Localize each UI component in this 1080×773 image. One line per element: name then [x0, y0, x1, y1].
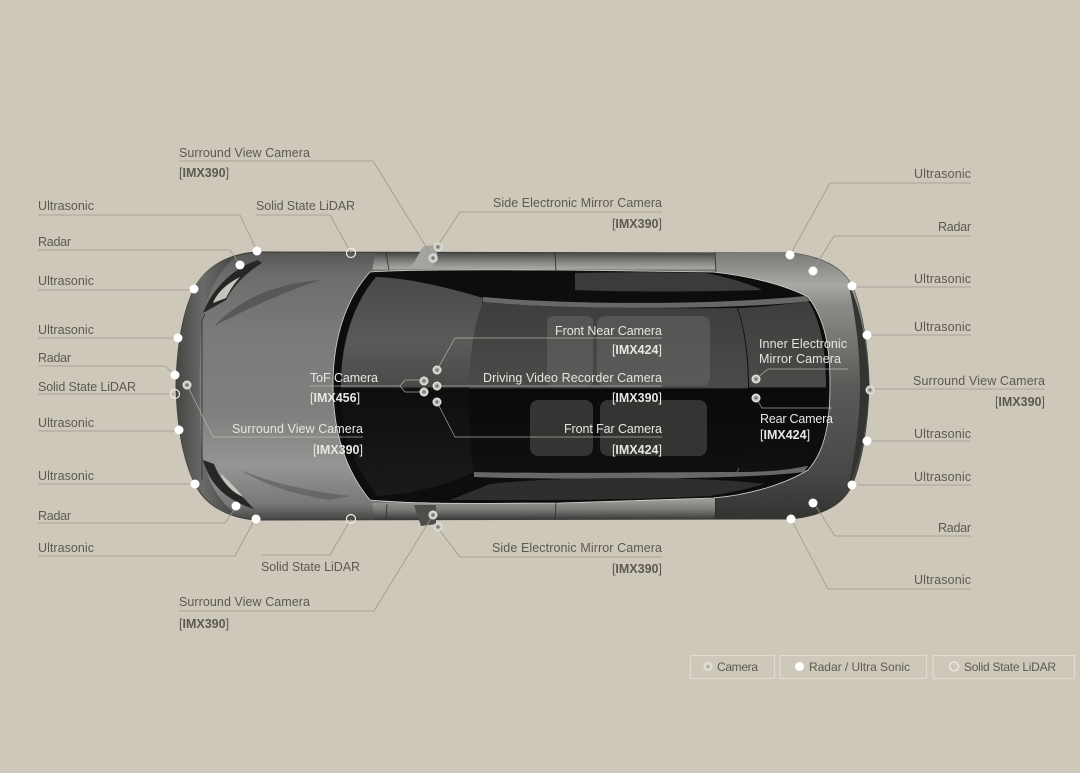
bottom mirror — [414, 505, 436, 526]
labels: interior cameras: Front Far Camera — [564, 422, 662, 436]
car top view — [176, 245, 869, 526]
panoramic roof — [469, 302, 748, 473]
labels: interior cameras: [IMX424] — [612, 443, 662, 457]
labels: right side: Ultrasonic — [914, 272, 971, 286]
legend — [690, 656, 1074, 678]
hood creases — [214, 280, 320, 326]
windshield — [341, 277, 483, 496]
bottom side window reflections — [450, 478, 765, 500]
labels: interior cameras: Driving Video Recorder Camera — [483, 371, 662, 385]
labels: right side: Ultrasonic — [914, 320, 971, 334]
labels: right side: Surround View Camera — [913, 374, 1045, 388]
labels: right side: [IMX390] — [995, 395, 1045, 409]
labels: left side: [IMX390] — [179, 166, 229, 180]
labels: left side: Solid State LiDAR — [261, 560, 360, 574]
legend: camera — [690, 656, 774, 678]
markers: solid state lidar — [170, 248, 356, 524]
rear rim — [848, 282, 869, 488]
labels: interior cameras: [IMX424] — [760, 428, 810, 442]
roof edge strips — [474, 296, 810, 479]
leader lines: exterior — [38, 161, 1045, 611]
legend: camera: Camera — [717, 660, 758, 674]
front seats — [547, 316, 710, 386]
labels: right side: Radar — [938, 220, 971, 234]
labels: interior cameras: [IMX390] — [612, 391, 662, 405]
labels: left side: Ultrasonic — [38, 323, 94, 337]
side windows and glass surround — [333, 270, 830, 503]
top mirror — [405, 245, 438, 268]
car body — [176, 252, 869, 520]
labels: left side: Ultrasonic — [38, 541, 94, 555]
labels: right side — [913, 167, 1045, 587]
labels: right side: Ultrasonic — [914, 427, 971, 441]
markers: radar and ultrasonic — [170, 246, 872, 524]
legend: radar and ultrasonic: Radar / Ultra Sonic — [809, 660, 910, 674]
legend: solid state lidar — [933, 656, 1074, 678]
labels: interior cameras: ToF Camera — [310, 371, 378, 385]
labels: left side: Surround View Camera — [179, 146, 310, 160]
top headlight — [203, 260, 262, 313]
labels: side mirror cameras — [492, 196, 662, 576]
labels: left side: Solid State LiDAR — [256, 199, 355, 213]
labels: left side: [IMX390] — [179, 617, 229, 631]
rear seats — [530, 400, 707, 456]
labels: right side: Radar — [938, 521, 971, 535]
top side window reflections — [575, 272, 762, 292]
labels: interior cameras — [232, 324, 847, 457]
rear deck — [715, 253, 869, 519]
labels: interior cameras: [IMX424] — [612, 343, 662, 357]
labels: left side: Ultrasonic — [38, 416, 94, 430]
labels: left side: Ultrasonic — [38, 469, 94, 483]
labels: left side: Ultrasonic — [38, 199, 94, 213]
labels: interior cameras: Rear Camera — [760, 412, 833, 426]
labels: left side: Surround View Camera — [179, 595, 310, 609]
labels: left side: Radar — [38, 351, 71, 365]
labels: side mirror cameras: Side Electronic Mirror Camera — [492, 541, 662, 555]
top sill — [372, 253, 715, 271]
bottom headlight — [203, 460, 254, 509]
labels: left side — [38, 146, 360, 631]
labels: right side: Ultrasonic — [914, 470, 971, 484]
labels: side mirror cameras: Side Electronic Mirror Camera — [493, 196, 662, 210]
bottom sill — [372, 499, 715, 519]
labels: left side: Ultrasonic — [38, 274, 94, 288]
labels: left side: Radar — [38, 235, 71, 249]
legend: solid state lidar: Solid State LiDAR — [964, 660, 1056, 674]
legend: radar and ultrasonic — [780, 656, 926, 678]
labels: right side: Ultrasonic — [914, 573, 971, 587]
trunk handle — [757, 496, 792, 513]
labels: side mirror cameras: [IMX390] — [612, 217, 662, 231]
rear window — [738, 301, 826, 472]
markers: cameras — [183, 243, 874, 531]
labels: interior cameras: [IMX456] — [310, 391, 360, 405]
front bumper rim — [176, 256, 236, 515]
labels: interior cameras: [IMX390] — [313, 443, 363, 457]
labels: interior cameras: Inner Electronic — [759, 337, 847, 351]
labels: side mirror cameras: [IMX390] — [612, 562, 662, 576]
labels: right side: Ultrasonic — [914, 167, 971, 181]
labels: left side: Solid State LiDAR — [38, 380, 136, 394]
labels: interior cameras: Mirror Camera — [759, 352, 841, 366]
labels: interior cameras: Surround View Camera — [232, 422, 363, 436]
labels: left side: Radar — [38, 509, 71, 523]
labels: interior cameras: Front Near Camera — [555, 324, 662, 338]
leader lines: interior — [187, 338, 848, 437]
